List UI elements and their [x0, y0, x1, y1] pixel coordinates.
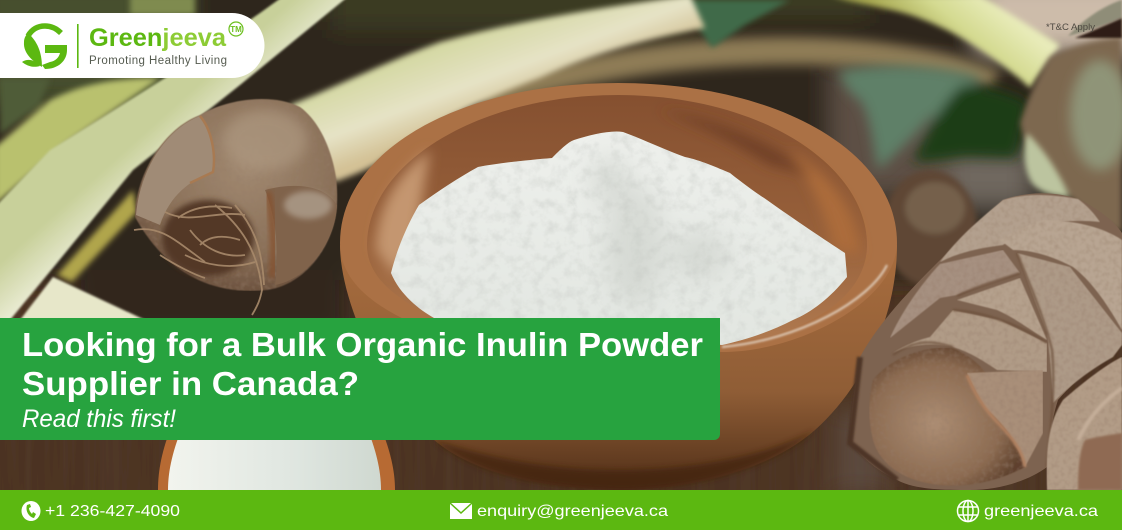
- root outer edge: [850, 357, 897, 480]
- icon: phone: [22, 501, 40, 521]
- main stalk: [0, 0, 350, 320]
- corner root: [1047, 357, 1122, 490]
- heading: Looking for a Bulk Organic Inulin Powder: [22, 326, 703, 363]
- back potato right: [883, 170, 977, 286]
- top leaf: [682, 0, 790, 48]
- top right bulb: [1020, 0, 1122, 233]
- wooden table: [0, 260, 1122, 495]
- icon: envelope: [450, 503, 472, 519]
- contact footer: [0, 490, 1122, 530]
- rim highlight: [722, 265, 887, 347]
- heading: Supplier in Canada?: [22, 365, 359, 402]
- inulin powder: [391, 132, 847, 345]
- phone: +1 236-427-4090: [45, 503, 180, 520]
- blurred leaves: [838, 66, 1028, 170]
- secondary stalks left: [0, 0, 195, 282]
- long right wrap: [1017, 253, 1122, 403]
- root base: [850, 193, 1122, 490]
- icon: globe: [958, 500, 978, 522]
- lower wrap: [893, 310, 1047, 372]
- phone: [22, 501, 180, 521]
- root knob: [869, 348, 1025, 486]
- powder shadows: [590, 156, 728, 305]
- logo pill: [0, 13, 265, 78]
- brand name: Greenjeeva: [89, 24, 227, 52]
- big root right: [850, 193, 1122, 490]
- bowl: [340, 83, 897, 490]
- flap: [967, 370, 1043, 467]
- central stalk to bulb: [290, 0, 705, 182]
- bulb left: [134, 99, 337, 315]
- subheading: Read this first!: [22, 405, 176, 433]
- top wrap: [940, 195, 1100, 262]
- T&C note: *T&C Apply: [1046, 22, 1096, 32]
- root creases: [893, 253, 1053, 467]
- middle wrap: [890, 250, 1020, 338]
- trademark: TM: [230, 25, 242, 34]
- email: enquiry@greenjeeva.ca: [477, 503, 668, 520]
- bowl body: [340, 245, 897, 490]
- trademark: [229, 22, 243, 36]
- bowl rim: [340, 83, 897, 352]
- bowl interior: [367, 95, 867, 343]
- coconut slice: [158, 425, 395, 490]
- icon: G leaf logo: [22, 26, 67, 69]
- rear tan stalk: [470, 37, 1000, 110]
- headline banner: [0, 318, 720, 440]
- top right stalk: [830, 0, 1060, 88]
- website: greenjeeva.ca: [984, 503, 1098, 520]
- divider: [77, 24, 79, 68]
- tagline: Promoting Healthy Living: [89, 55, 227, 67]
- upper right wrap: [1000, 220, 1122, 330]
- pale lower stalk: [20, 277, 145, 320]
- interior light patches: [376, 110, 860, 275]
- lower bowl shading: [434, 430, 815, 490]
- website: [958, 500, 1098, 522]
- heading: [22, 326, 703, 402]
